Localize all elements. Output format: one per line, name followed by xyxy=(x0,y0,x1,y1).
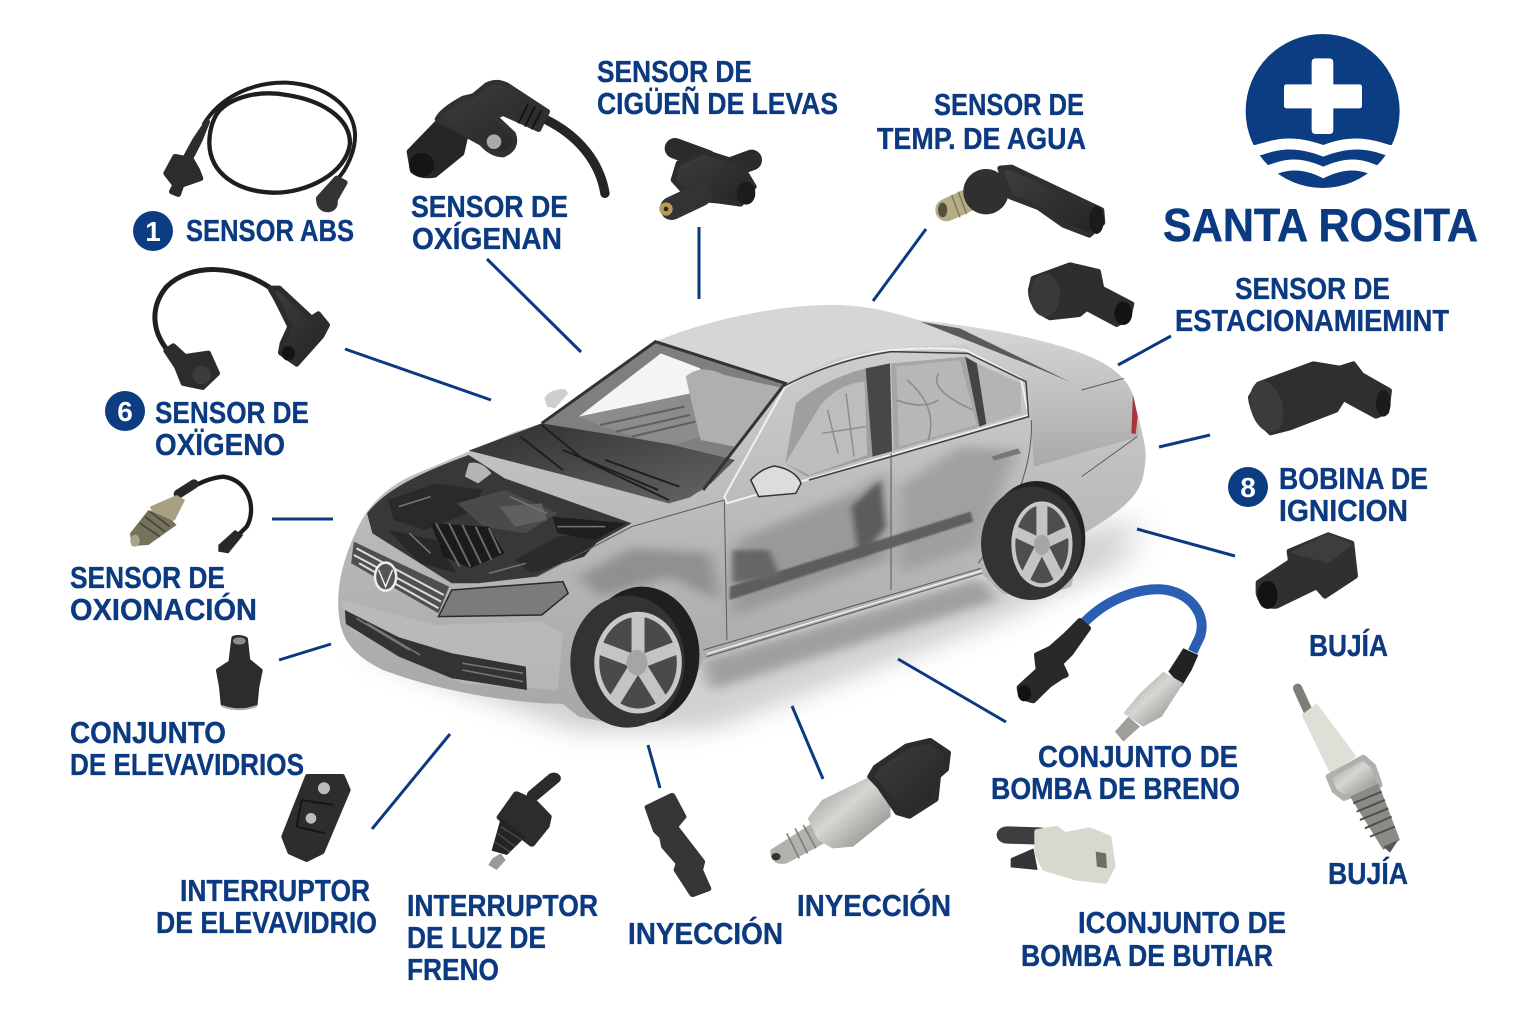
windshield glass xyxy=(579,353,701,417)
rear wheel xyxy=(981,481,1085,600)
label: sensor de oxionacion: SENSOR DE xyxy=(70,560,225,595)
badge 8 xyxy=(1228,467,1268,507)
dashboard xyxy=(579,393,701,447)
label: iconjunto de bomba de butiar: ICONJUNTO DE xyxy=(1078,905,1286,940)
arrow: bomba breno xyxy=(898,659,1006,722)
badge 6 xyxy=(105,391,145,431)
windshield pillars xyxy=(542,342,785,490)
leader lines xyxy=(272,227,1235,829)
label: bujia upper: BUJÍA xyxy=(1309,628,1388,663)
part: large parking sensor xyxy=(1244,364,1391,436)
label: conjunto de elevavidrios xyxy=(70,715,304,782)
part: threaded oxygen sensor xyxy=(130,477,251,553)
label: inyeccion right: INYECCIÓN xyxy=(797,887,951,923)
part: white connector xyxy=(1007,829,1112,881)
part: camshaft sensor xyxy=(659,148,755,216)
label: sensor de oxigenan xyxy=(411,189,568,256)
label: sensor de oxigeno: SENSOR DE xyxy=(155,395,309,430)
windshield interior xyxy=(542,342,785,492)
part: coil connector xyxy=(1258,533,1355,609)
panel: car cutaway illustration xyxy=(338,305,1146,733)
label: conjunto de bomba de breno xyxy=(991,739,1240,806)
part: window assembly plug xyxy=(219,637,260,709)
label: interruptor de luz de freno: FRENO xyxy=(407,952,499,987)
label: sensor de estacionamiento: ESTACIONAMIEMINT xyxy=(1175,303,1449,338)
label: bobina de ignicion xyxy=(1279,461,1428,528)
roof xyxy=(656,305,965,383)
arrow: oxionacion xyxy=(272,518,333,520)
label: sensor de ciguenal de levas xyxy=(597,54,838,121)
label: sensor de temp. de agua xyxy=(877,87,1086,156)
badge 1 xyxy=(133,211,173,251)
label: sensor de temp. de agua: SENSOR DE xyxy=(934,87,1084,122)
part: water temperature sensor xyxy=(938,167,1104,235)
part: small parking sensor xyxy=(1030,265,1132,325)
part: window switch xyxy=(284,777,348,859)
part: injector small xyxy=(648,796,708,894)
arrow: conjunto elevavidrios xyxy=(279,644,331,660)
label: inyeccion left: INYECCIÓN xyxy=(628,915,783,951)
arrow: bujia xyxy=(1137,529,1235,556)
arrow: ciguenal xyxy=(698,227,700,299)
label: iconjunto de bomba de butiar: BOMBA DE BUTIAR xyxy=(1021,938,1273,973)
headlight xyxy=(439,582,568,617)
label: conjunto de elevavidrios: CONJUNTO xyxy=(70,715,226,750)
label: interruptor de luz de freno xyxy=(407,888,598,987)
door handle xyxy=(992,448,1021,461)
part: brake light switch xyxy=(488,778,554,870)
label: bobina de ignicion: IGNICION xyxy=(1279,493,1408,528)
badge 1: 1 xyxy=(145,216,161,247)
part: oxygen sensor cable xyxy=(155,270,327,387)
label: conjunto de bomba de breno: BOMBA DE BRENO xyxy=(991,771,1240,806)
part: blue cable oxygen sensor xyxy=(1018,589,1202,742)
part: ABS sensor xyxy=(166,83,355,210)
side windows xyxy=(724,348,1029,503)
label: sensor de oxigenan: SENSOR DE xyxy=(411,189,568,224)
lower grille xyxy=(345,610,527,690)
car body xyxy=(338,305,1146,727)
logo: Santa Rosita xyxy=(1163,34,1478,251)
label: interruptor de elevavidrio: INTERRUPTOR xyxy=(180,873,370,908)
door seams and sills xyxy=(536,378,1137,657)
car ground shadow xyxy=(362,513,1135,733)
logo wordmark: SANTA ROSITA xyxy=(1163,199,1478,251)
label: interruptor de elevavidrio xyxy=(156,873,377,940)
side mirror xyxy=(751,466,801,497)
arrow: inyeccion left xyxy=(648,745,660,788)
far mirror xyxy=(544,389,568,408)
part: crank sensor with cable xyxy=(409,82,605,193)
engine bay xyxy=(367,455,632,583)
arrow: oxigeno xyxy=(345,349,491,400)
arrow: bobina xyxy=(1159,435,1210,447)
part: spark plug xyxy=(1298,688,1400,853)
rear deck xyxy=(920,322,1139,467)
label: conjunto de bomba de breno: CONJUNTO DE xyxy=(1038,739,1238,774)
label: sensor de estacionamiento xyxy=(1175,271,1449,338)
badge 6: 6 xyxy=(117,396,133,427)
arrow: temp agua xyxy=(873,229,926,301)
label: interruptor de elevavidrio: DE ELEVAVIDRIO xyxy=(156,905,377,940)
part: injector large xyxy=(770,741,948,864)
label: bujia lower: BUJÍA xyxy=(1328,856,1408,891)
rear seat xyxy=(896,360,977,447)
front seat xyxy=(785,382,867,475)
seat seen through windshield xyxy=(686,370,780,447)
label: sensor de oxionacion: OXIONACIÓN xyxy=(70,591,257,627)
arrow: interruptor elevavidrio xyxy=(372,734,450,829)
label: sensor de ciguenal de levas: SENSOR DE xyxy=(597,54,752,89)
label: interruptor de luz de freno: DE LUZ DE xyxy=(407,920,546,955)
arrow: inyeccion right xyxy=(792,706,823,779)
label: sensor ABS: SENSOR ABS xyxy=(186,213,354,248)
badge 8: 8 xyxy=(1240,472,1256,503)
arrow: estacionamiento xyxy=(1118,336,1171,365)
label: iconjunto de bomba de butiar xyxy=(1021,905,1286,973)
label: sensor de oxionacion xyxy=(70,560,257,627)
label: sensor de oxigeno: OXÏGENO xyxy=(155,427,285,462)
label: bobina de ignicion: BOBINA DE xyxy=(1279,461,1428,496)
tail light xyxy=(1131,395,1138,434)
label: interruptor de luz de freno: INTERRUPTOR xyxy=(407,888,598,923)
label: sensor de oxigenan: OXÍGENAN xyxy=(412,221,562,256)
label: sensor de temp. de agua: TEMP. DE AGUA xyxy=(877,121,1086,156)
label: conjunto de elevavidrios: DE ELEVAVIDRIOS xyxy=(70,747,304,782)
label: sensor de oxigeno xyxy=(155,395,309,462)
arrow: oxigenan xyxy=(487,259,581,352)
open hood underside xyxy=(469,423,735,503)
label: sensor de estacionamiento: SENSOR DE xyxy=(1235,271,1390,306)
grille xyxy=(351,542,449,613)
label: sensor de ciguenal de levas: CIGÜEÑ DE LEVAS xyxy=(597,86,838,121)
front wheel xyxy=(570,587,699,728)
rear window strip xyxy=(920,322,1071,382)
logo emblem xyxy=(1230,34,1417,188)
ghosted interior in doors xyxy=(579,447,1018,617)
bumper highlight xyxy=(341,600,563,690)
